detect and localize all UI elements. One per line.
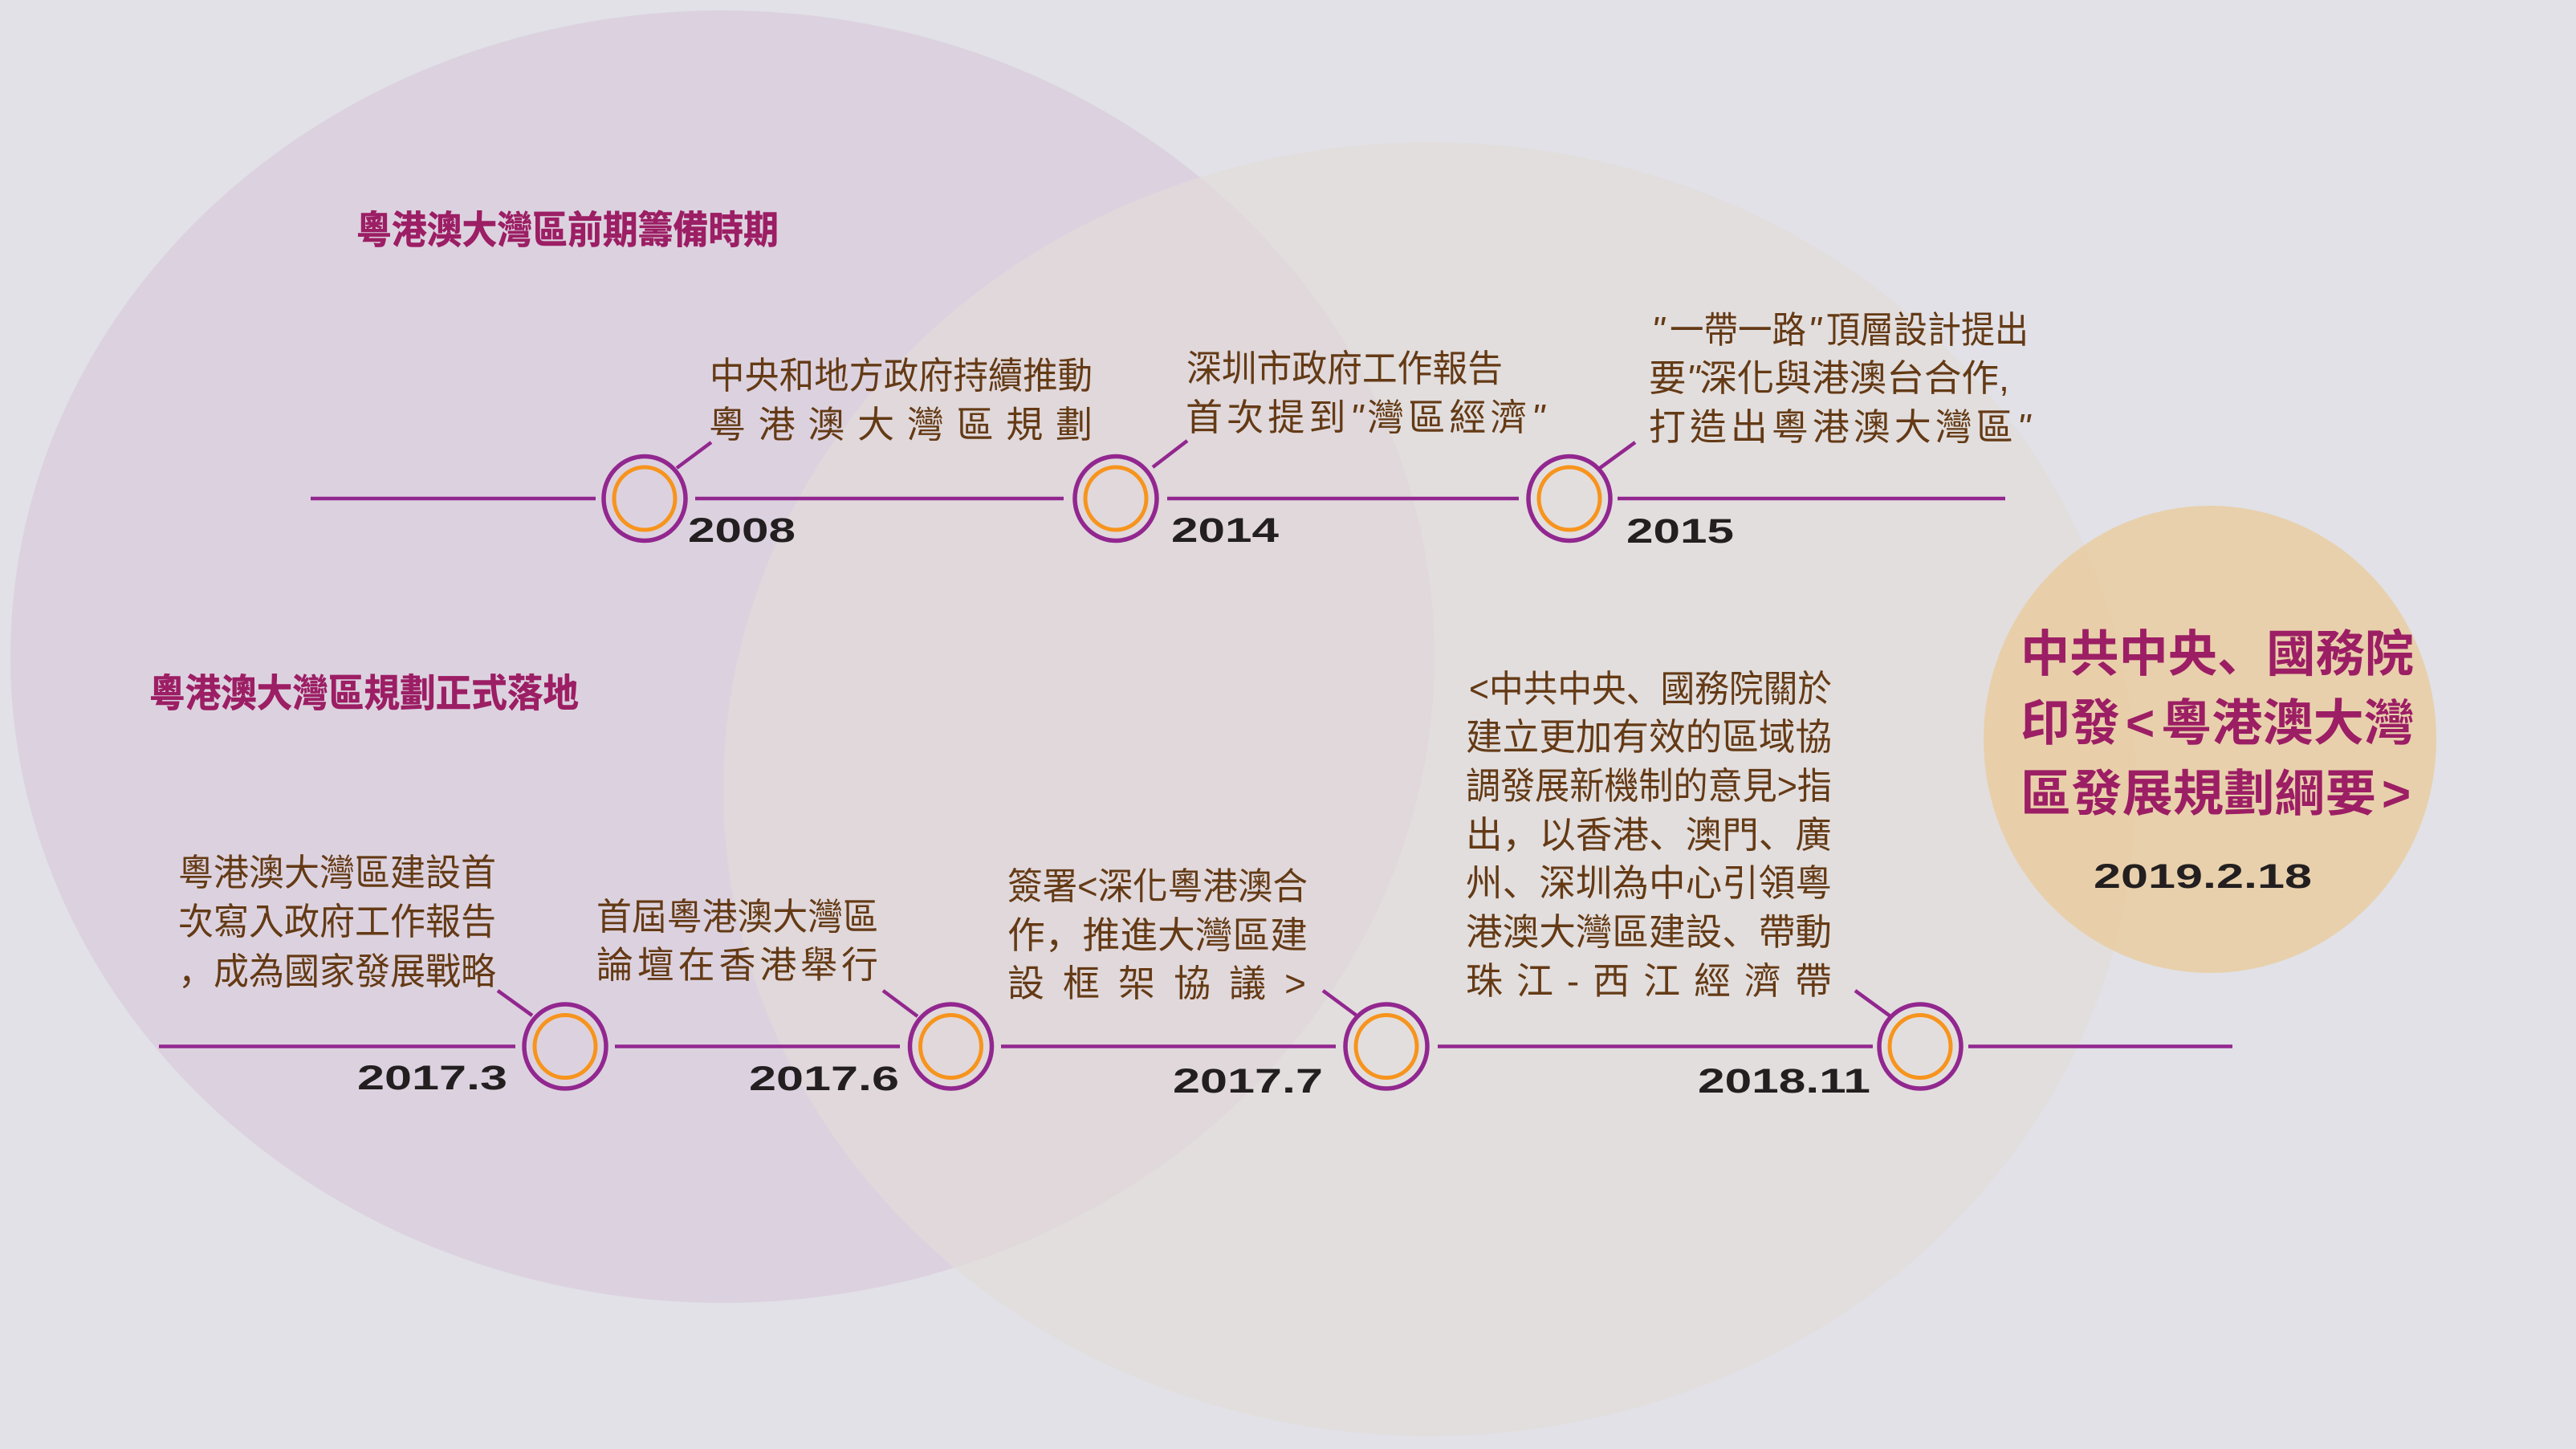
text 2018.11: 港澳大灣區建設、帶動 (1466, 911, 1832, 953)
node 2008 (604, 456, 686, 541)
text 2018.11: 珠江-西江經濟帶 (1466, 960, 1832, 1002)
year 2014: 2014 (1171, 511, 1279, 550)
heading: preparation period: 粵港澳大灣區前期籌備時期 (356, 210, 779, 252)
connector 2017.6 (883, 991, 918, 1016)
text 2015: 一帶一路 (1670, 309, 1806, 351)
connector 2014 (1153, 441, 1187, 467)
year 2018.11: 2018.11 (1698, 1062, 1870, 1101)
milestone 2017.7 (1007, 865, 1427, 1101)
connector 2018.11 (1855, 991, 1890, 1016)
text 2017.7 (1007, 865, 1308, 1004)
top line segments (311, 497, 2005, 500)
timeline: bottom row (159, 668, 2232, 1101)
node 2018.11 (1879, 1004, 1961, 1089)
year 2015: 2015 (1626, 512, 1734, 551)
text 2017.7: 作，推進大灣區建 (1007, 914, 1308, 956)
connector 2017.7 (1323, 991, 1357, 1016)
text 2008: 粵港澳大灣區規劃 (709, 404, 1093, 446)
final milestone title: > (2382, 767, 2411, 822)
year 2008: 2008 (688, 511, 796, 550)
text 2015: " (1808, 309, 1823, 351)
node 2017.3 (524, 1004, 606, 1089)
text 2014: 首次提到"灣區經濟" (1186, 397, 1547, 438)
text 2017.3: 粵港澳大灣區建設首 (178, 852, 496, 893)
text 2017.6: 論壇在香港舉行 (596, 944, 878, 986)
milestone 2017.3 (178, 852, 606, 1097)
final milestone title: < (2126, 696, 2155, 751)
text 2017.3 (178, 852, 496, 992)
milestone 2017.6 (596, 896, 992, 1098)
milestone 2014 (1075, 348, 1547, 550)
connector 2015 (1600, 442, 1635, 468)
connector 2008 (677, 442, 711, 468)
text 2017.3: 次寫入政府工作報告 (178, 901, 496, 942)
text 2017.3: ，成為國家發展戰略 (178, 950, 496, 992)
heading: formal implementation: 粵港澳大灣區規劃正式落地 (149, 673, 579, 715)
final milestone title: 粵港澳大灣 (2161, 696, 2415, 751)
milestone 2008 (604, 355, 1093, 550)
milestone 2018.11 (1466, 668, 1961, 1101)
text 2018.11: 州、深圳為中心引領粵 (1466, 862, 1832, 904)
text 2015: " (1651, 309, 1666, 351)
text 2015: 要"深化與港澳台合作, (1649, 357, 2009, 399)
final milestone title: 區發展規劃綱要 (2021, 767, 2376, 822)
timeline: top row (311, 309, 2033, 551)
text 2015: 打造出粵港澳大灣區" (1649, 406, 2033, 448)
text 2018.11: 調發展新機制的意見>指 (1466, 765, 1832, 807)
text 2015 (1649, 309, 2033, 448)
beige background ellipse (723, 142, 2136, 1436)
text 2017.6 (596, 896, 878, 986)
final milestone title: 印發 (2021, 696, 2120, 751)
text 2018.11: <中共中央、國務院關於 (1469, 668, 1832, 710)
node 2015 (1528, 456, 1610, 541)
text 2018.11: 建立更加有效的區域協 (1466, 716, 1832, 758)
connector 2017.3 (498, 991, 532, 1016)
text 2018.11 (1466, 668, 1832, 1002)
text 2014: 深圳市政府工作報告 (1186, 348, 1503, 389)
gold circle: final milestone (1984, 506, 2436, 973)
year 2017.7: 2017.7 (1173, 1062, 1323, 1101)
node 2017.7 (1345, 1004, 1427, 1089)
text 2018.11: 出，以香港、澳門、廣 (1466, 814, 1832, 856)
text 2017.7: 設框架協議> (1007, 963, 1306, 1004)
text 2015: 頂層設計提出 (1826, 309, 2029, 351)
node 2014 (1075, 456, 1157, 541)
node 2017.6 (910, 1004, 992, 1089)
bottom line segments (159, 1044, 2232, 1048)
text 2017.7: 簽署<深化粵港澳合 (1007, 865, 1308, 907)
final milestone date: 2019.2.18 (2094, 857, 2312, 896)
final milestone title: 中共中央、國務院 (2021, 627, 2414, 682)
year 2017.3: 2017.3 (357, 1059, 507, 1097)
purple background ellipse (10, 10, 1435, 1303)
milestone 2015 (1528, 309, 2033, 551)
year 2017.6: 2017.6 (749, 1060, 899, 1098)
text 2017.6: 首屆粵港澳大灣區 (596, 896, 878, 938)
text 2014 (1186, 348, 1547, 438)
final milestone title (2021, 627, 2415, 822)
text 2008: 中央和地方政府持續推動 (710, 355, 1093, 397)
text 2008 (709, 355, 1093, 446)
